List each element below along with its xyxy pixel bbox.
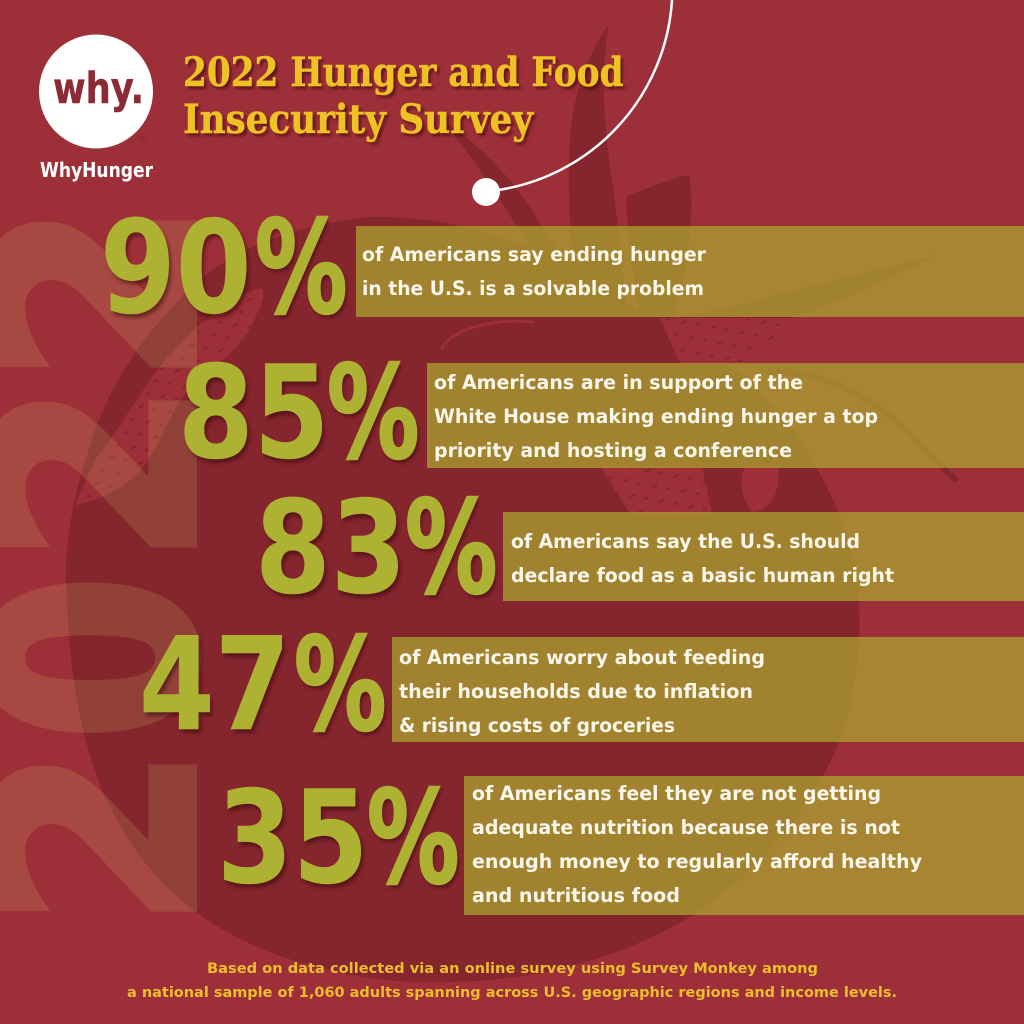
description: White House making ending hunger a top [434, 405, 878, 428]
description [472, 782, 922, 907]
logo circle [39, 34, 153, 148]
fruit: body [66, 217, 859, 982]
watermark: 2022 [0, 202, 259, 928]
logo: WhyHunger [39, 34, 153, 182]
leaf: curl [770, 372, 955, 479]
description [511, 530, 894, 587]
fruit: mottled texture lower [600, 466, 712, 514]
figure [216, 773, 476, 905]
description: of Americans say the U.S. should [511, 530, 860, 553]
fruit: mottled highlight lower [600, 466, 712, 514]
figure: 85 [178, 339, 329, 488]
figure: 35 [216, 764, 368, 913]
description: priority and hosting a conference [434, 439, 792, 462]
figure: 90 [100, 194, 251, 343]
figure: % [367, 764, 459, 913]
description: adequate nutrition because there is not [472, 816, 900, 839]
logo wordmark: WhyHunger [40, 158, 153, 182]
footnote: a national sample of 1,060 adults spanning across U.S. geographic regions and income levels. [127, 985, 897, 1001]
description: & rising costs of groceries [399, 714, 675, 737]
figure [100, 203, 360, 335]
logo trademark: TM [138, 137, 146, 143]
text band [427, 363, 1024, 468]
logo mark text: why. [53, 64, 144, 114]
description: in the U.S. is a solvable problem [362, 277, 704, 300]
figure: % [327, 339, 419, 488]
description: and nutritious food [472, 884, 680, 907]
leaf: left [440, 120, 610, 322]
fruit: light highlight right [741, 466, 779, 512]
stat row: 47% [139, 620, 1024, 752]
leaf: right long [660, 255, 937, 322]
fruit: crescent speckle [75, 288, 263, 505]
figure: 47 [139, 611, 290, 760]
figure: 83 [254, 474, 406, 623]
text band [503, 512, 1024, 601]
fruit: light crescent [75, 288, 263, 505]
decorative arc with dot [472, 0, 672, 206]
figure [139, 620, 399, 752]
footnote [127, 961, 897, 1001]
stat row: 85% [178, 348, 1024, 480]
text band [464, 776, 1024, 915]
description: of Americans are in support of the [434, 371, 803, 394]
figure: % [405, 474, 497, 623]
description [362, 243, 706, 300]
description: enough money to regularly afford healthy [472, 850, 922, 873]
description: of Americans say ending hunger [362, 243, 706, 266]
fruit: mottled highlight top right [660, 318, 800, 364]
fruit: mottled arc [441, 321, 535, 350]
fruit: mottled texture top right [660, 318, 800, 364]
stem [627, 175, 691, 330]
leaf: tall [569, 24, 628, 320]
figure [254, 483, 514, 615]
figure: % [294, 611, 386, 760]
description: of Americans worry about feeding [399, 646, 765, 669]
description [399, 646, 765, 737]
stat row: 35% [216, 773, 1024, 915]
description: declare food as a basic human right [511, 564, 894, 587]
description: of Americans feel they are not getting [472, 782, 881, 805]
footnote: Based on data collected via an online survey using Survey Monkey among [207, 961, 818, 977]
description [434, 371, 878, 462]
figure: % [255, 194, 347, 343]
text band [356, 226, 1024, 317]
figure [178, 348, 438, 480]
description: their households due to inflation [399, 680, 753, 703]
text band [392, 637, 1024, 742]
title [183, 49, 703, 143]
title: Insecurity Survey [183, 96, 533, 143]
stat row: 83% [254, 483, 1024, 615]
stat row: 90% [100, 203, 1024, 335]
title: 2022 Hunger and Food [183, 49, 624, 96]
